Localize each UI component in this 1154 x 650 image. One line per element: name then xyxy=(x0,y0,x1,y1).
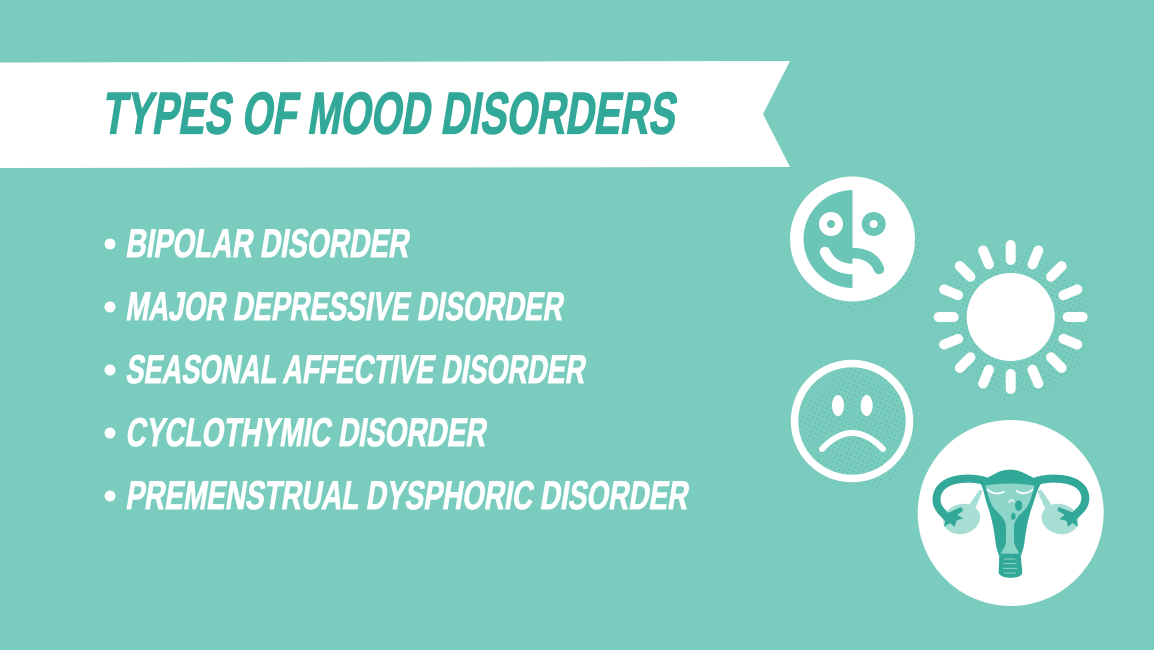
title: TYPES OF MOOD DISORDERS xyxy=(99,80,682,146)
title banner xyxy=(0,61,790,168)
cervix xyxy=(999,555,1022,578)
item: cyclothymic disorder: CYCLOTHYMIC DISORDER xyxy=(124,410,491,455)
uterine body xyxy=(979,470,1043,556)
closed eyes xyxy=(987,490,1004,494)
item: cyclothymic disorder xyxy=(105,410,491,455)
icon: sun xyxy=(934,240,1103,410)
item: seasonal affective disorder xyxy=(105,347,590,392)
ovaries xyxy=(940,500,984,538)
cervix ribs xyxy=(1003,559,1017,573)
item: premenstrual dysphoric disorder: PREMENSTRUAL DYSPHORIC DISORDER xyxy=(124,473,693,518)
inner body light area xyxy=(985,484,1035,554)
list of mood disorders xyxy=(105,221,693,518)
item: major depressive disorder xyxy=(105,284,568,329)
tear marks xyxy=(1015,500,1022,511)
item: bipolar disorder xyxy=(105,221,414,266)
item: premenstrual dysphoric disorder xyxy=(105,473,693,518)
item: major depressive disorder: MAJOR DEPRESSIVE DISORDER xyxy=(124,284,568,329)
icon: half happy half sad face xyxy=(790,176,934,322)
item: seasonal affective disorder: SEASONAL AFFECTIVE DISORDER xyxy=(124,347,590,392)
icon: uterus in white circle xyxy=(918,420,1104,606)
icon: sad face xyxy=(790,360,929,500)
item: bipolar disorder: BIPOLAR DISORDER xyxy=(124,221,414,266)
fimbriae xyxy=(944,507,963,527)
fallopian tubes xyxy=(937,479,985,519)
